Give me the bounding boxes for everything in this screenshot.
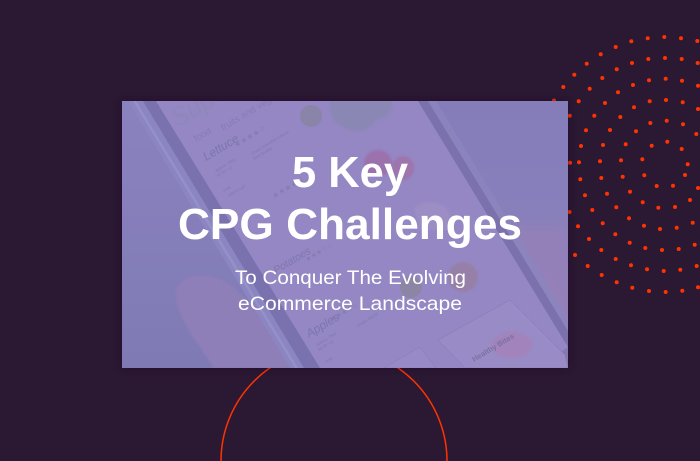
subtitle (235, 267, 466, 315)
fingers on screen (418, 212, 446, 228)
tile: recipe image (438, 300, 568, 368)
tile caption: Healthy Bites (470, 332, 516, 364)
phone glass right (428, 101, 568, 331)
icon: tomato 1 (364, 150, 392, 176)
description apples: approx. 25oz (315, 331, 337, 347)
rating tomatoes: ★★★★☆ (270, 175, 306, 201)
description lettuce: approx. 150g (214, 157, 237, 173)
hand thumb (176, 276, 300, 368)
description lettuce: Best Quality (252, 145, 273, 161)
product: lettuce: Lettuce (200, 131, 242, 164)
description apples (316, 332, 336, 362)
app title: Superfoods (165, 39, 294, 133)
screen content (172, 101, 568, 368)
icon: tomato 2 (392, 156, 414, 180)
icon: apple (448, 262, 478, 292)
phone glass edge (211, 235, 304, 368)
rating apples: ★★★★☆ (329, 301, 360, 324)
product: apples: Apples (302, 310, 342, 341)
tile: bottom (384, 347, 436, 368)
card shadow (122, 101, 568, 368)
subtitle: To Conquer The Evolving (235, 267, 466, 289)
description apples: units (324, 355, 334, 364)
origin label: Origin: 8DCR (356, 311, 379, 328)
title: 5 Key (292, 149, 408, 197)
description lettuce: Add to cart (227, 183, 247, 198)
rating potatoes: ★★★☆☆ (304, 241, 335, 264)
decorative arc (221, 348, 447, 461)
bottom bezel corner (562, 347, 568, 366)
icon: badge (400, 276, 422, 298)
photo backdrop (122, 101, 568, 368)
description lettuce: $7.99 / oz (216, 165, 234, 178)
description lettuce: Green Smoothie Lettuce (250, 129, 290, 156)
decorative dotted circle (552, 35, 700, 294)
description apples: $0.99 / oz (317, 339, 335, 352)
phone bezel right (418, 101, 568, 347)
icon: lettuce (330, 101, 392, 131)
product: potatoes: Potatoes (271, 245, 314, 277)
blossom in tile (494, 333, 530, 357)
breadcrumb: food (192, 126, 213, 145)
phone screen (156, 101, 568, 368)
pink glow right (519, 230, 562, 262)
description lettuce: units (222, 184, 232, 193)
title (178, 149, 522, 249)
title: CPG Challenges (178, 201, 522, 249)
phone bezel left (143, 101, 320, 368)
description lettuce (214, 129, 290, 198)
breadcrumb category: fruits and vegetables (219, 79, 300, 134)
rating lettuce: ★★★★☆ (232, 124, 268, 150)
backdrop right of phone (562, 288, 568, 318)
photo card (122, 101, 568, 368)
icon: discount badge (300, 105, 322, 127)
subtitle: eCommerce Landscape (238, 293, 462, 315)
